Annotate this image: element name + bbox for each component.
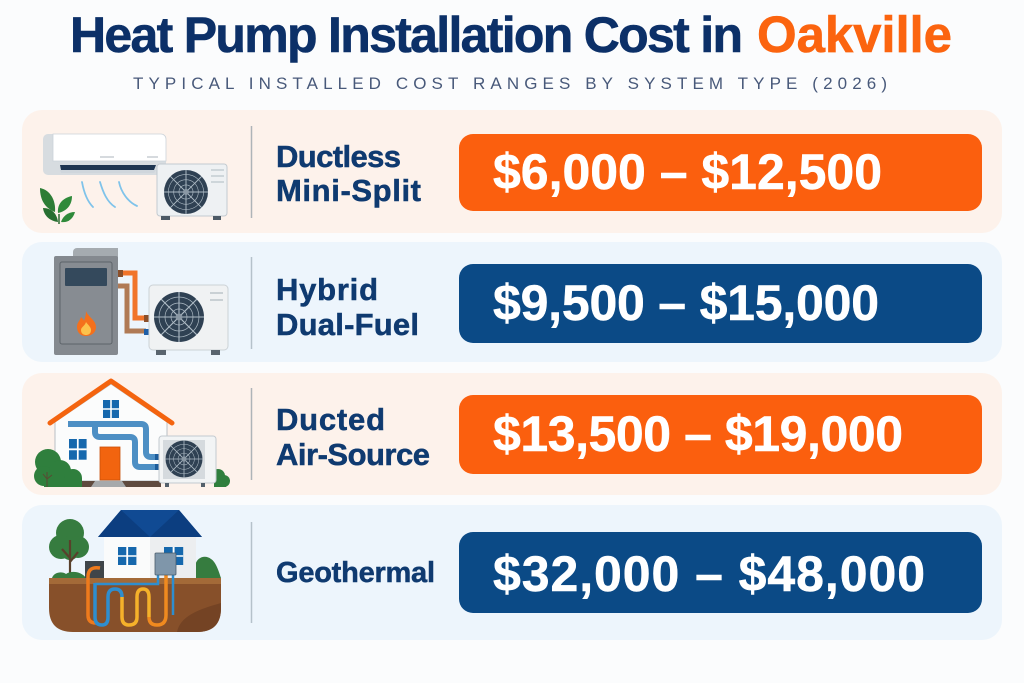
label: Ductless: [276, 139, 401, 174]
cost bar: [459, 532, 982, 613]
title: Oakville: [757, 6, 952, 63]
cost bar: $13,500 – $19,000: [493, 406, 903, 462]
icon: house with ground loop: [49, 510, 221, 632]
cost bar: $6,000 – $12,500: [493, 144, 882, 200]
ground loop pipes: [88, 568, 173, 625]
label: [276, 272, 419, 342]
icon: furnace and outdoor unit: [54, 248, 228, 355]
label: Dual-Fuel: [276, 307, 419, 342]
cost bar: $9,500 – $15,000: [493, 275, 879, 331]
icon: house with ducts and outdoor unit: [34, 381, 230, 487]
label: Hybrid: [276, 272, 378, 307]
label: Ducted: [276, 402, 385, 437]
label: Mini-Split: [276, 173, 421, 208]
cost bar: $32,000 – $48,000: [493, 546, 925, 602]
label: [276, 139, 421, 208]
panel: hybrid dual-fuel: [22, 242, 1002, 362]
panel: ductless mini-split: [22, 110, 1002, 233]
title: Heat Pump Installation Cost in: [70, 7, 743, 63]
cost bar: [459, 264, 982, 343]
icon: ductless mini-split system: [40, 134, 227, 224]
subtitle: TYPICAL INSTALLED COST RANGES BY SYSTEM TYPE (2026): [133, 74, 887, 93]
panel: ducted air-source: [22, 373, 1002, 495]
panel: geothermal: [22, 505, 1002, 640]
label: Air-Source: [276, 437, 430, 472]
label: [276, 402, 430, 472]
cost bar: [459, 134, 982, 211]
cost bar: [459, 395, 982, 474]
label: Geothermal: [276, 557, 435, 589]
